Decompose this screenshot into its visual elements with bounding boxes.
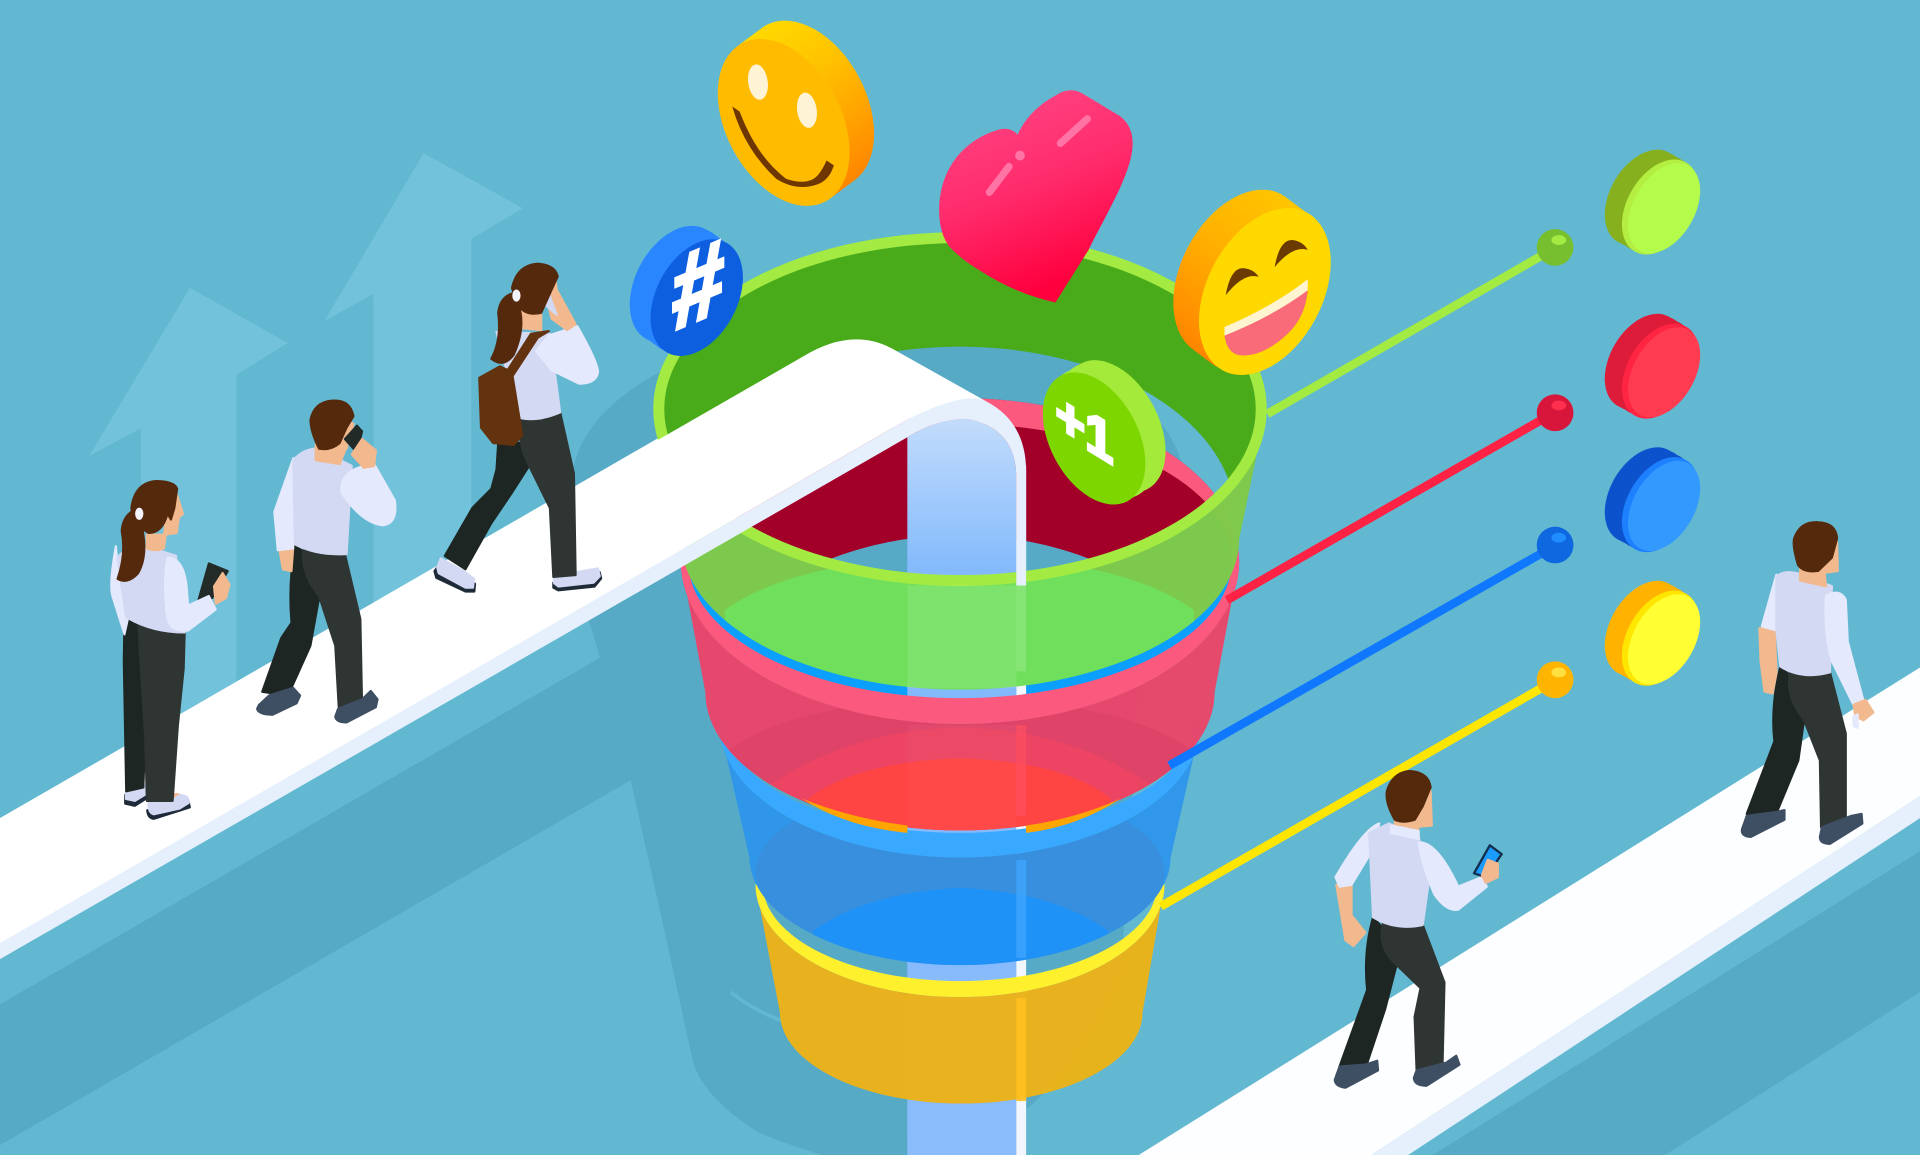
white path top and curved lip	[0, 339, 1026, 959]
background arrow: right	[324, 153, 523, 637]
back wall: green	[664, 243, 1256, 479]
icon: hashtag disc: #	[672, 216, 724, 353]
back wall: blue	[682, 550, 1240, 696]
icon: laughing face	[1146, 167, 1358, 397]
person: man walking with blue phone	[1335, 771, 1502, 1088]
shadow band lower right	[1433, 851, 1920, 1155]
icon: plus one disc: +1	[1056, 380, 1113, 478]
vertical tube	[907, 419, 1026, 1155]
icon: smiley	[691, 0, 901, 228]
connector line: green	[1267, 229, 1573, 414]
person: man walking away on right path	[1742, 522, 1873, 844]
coin: blue	[1589, 434, 1715, 566]
coin: yellow	[1589, 567, 1715, 699]
left white path lower part	[0, 352, 931, 959]
connector line: red	[1227, 394, 1573, 600]
coin: red	[1589, 300, 1715, 432]
section: red	[681, 561, 1240, 830]
tube seen through walls	[907, 585, 1026, 1101]
funnel shadow behind top	[572, 325, 1184, 643]
person: woman with backpack	[434, 264, 601, 591]
orange slivers under red wall	[802, 799, 1120, 833]
connector line: blue	[1169, 527, 1573, 766]
icon: heart	[939, 90, 1133, 303]
funnel back walls	[664, 243, 1256, 721]
shadow band under left path	[0, 551, 1145, 1155]
icon: hashtag disc	[611, 210, 762, 372]
funnel front walls	[654, 238, 1266, 1104]
light arc in funnel shadow	[731, 992, 784, 1021]
background arrow: left	[89, 288, 288, 759]
connector line: yellow	[1161, 661, 1573, 906]
back wall: red	[736, 398, 1214, 558]
right white path	[1139, 668, 1920, 1155]
icon: plus one disc	[1022, 343, 1187, 522]
section: blue	[720, 739, 1200, 966]
rim: red ring	[681, 398, 1239, 724]
section: green	[654, 238, 1266, 735]
person: woman with phone in hand	[111, 481, 230, 819]
coin: green	[1589, 136, 1715, 268]
section: yellow	[756, 884, 1164, 1104]
person: man on phone call	[257, 401, 395, 722]
